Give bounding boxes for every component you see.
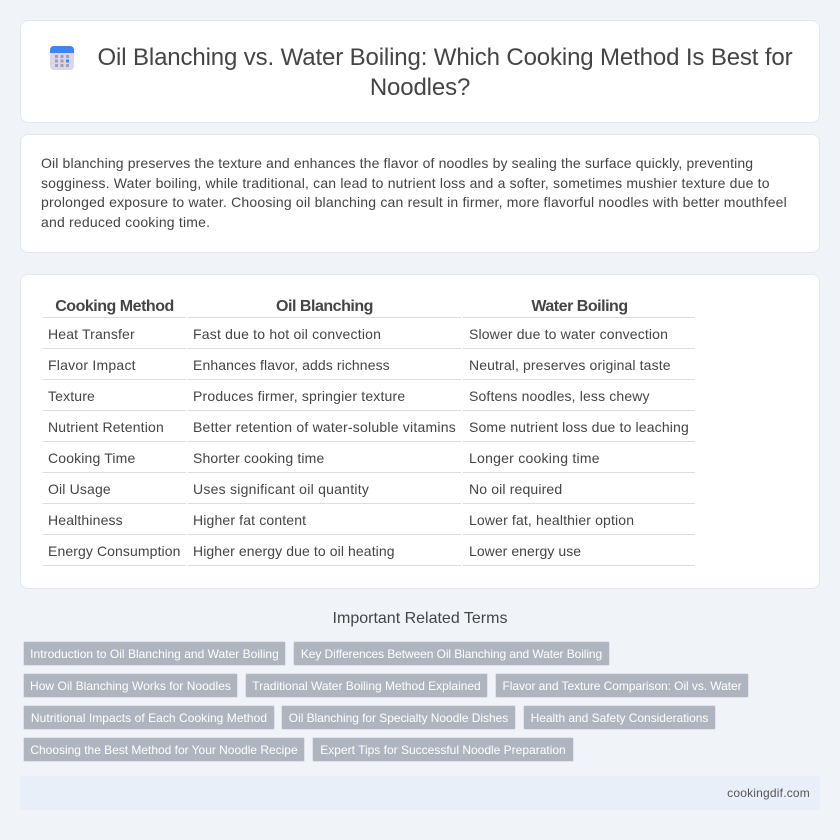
comparison table: Higher fat content bbox=[193, 512, 306, 528]
comparison table: Softens noodles, less chewy bbox=[469, 388, 650, 404]
header panel bbox=[20, 20, 820, 123]
related term tags: Flavor and Texture Comparison: Oil vs. Water bbox=[502, 679, 742, 693]
comparison table: Cooking Time bbox=[48, 450, 135, 466]
comparison table: Fast due to hot oil convection bbox=[193, 326, 381, 342]
comparison table: Produces firmer, springier texture bbox=[193, 388, 405, 404]
intro paragraph: Oil blanching preserves the texture and enhances the flavor of noodles by sealing the surface quickly, preventing bbox=[41, 155, 753, 171]
related term tags: How Oil Blanching Works for Noodles bbox=[30, 679, 231, 693]
comparison table: Cooking Method bbox=[55, 298, 174, 315]
comparison table: Water Boiling bbox=[531, 298, 628, 315]
comparison table: Energy Consumption bbox=[48, 543, 181, 559]
comparison table bbox=[43, 298, 695, 566]
related term tags: Traditional Water Boiling Method Explained bbox=[252, 679, 481, 693]
footer source text: cookingdif.com bbox=[727, 786, 810, 800]
comparison table: Slower due to water convection bbox=[469, 326, 668, 342]
comparison table: Oil Usage bbox=[48, 481, 111, 497]
related term tags: Oil Blanching for Specialty Noodle Dishes bbox=[289, 711, 508, 725]
comparison table: Flavor Impact bbox=[48, 357, 136, 373]
comparison table: Healthiness bbox=[48, 512, 123, 528]
comparison table panel bbox=[20, 274, 820, 589]
comparison table: Uses significant oil quantity bbox=[193, 481, 369, 497]
title: Oil Blanching vs. Water Boiling: Which Cooking Method Is Best for bbox=[98, 44, 792, 71]
comparison table: Shorter cooking time bbox=[193, 450, 324, 466]
comparison table: Higher energy due to oil heating bbox=[193, 543, 395, 559]
comparison table: Oil Blanching bbox=[276, 298, 373, 315]
comparison table: Lower energy use bbox=[469, 543, 581, 559]
comparison table: Texture bbox=[48, 388, 95, 404]
intro paragraph: prolonged exposure to water. Choosing oil blanching can result in firmer, more flavorful noodles with better mouthfeel bbox=[41, 194, 787, 210]
related term tags: Nutritional Impacts of Each Cooking Method bbox=[31, 711, 267, 725]
related terms heading: Important Related Terms bbox=[333, 610, 507, 627]
comparison table: Some nutrient loss due to leaching bbox=[469, 419, 689, 435]
comparison table: Heat Transfer bbox=[48, 326, 135, 342]
comparison table: Nutrient Retention bbox=[48, 419, 164, 435]
related term tags: Health and Safety Considerations bbox=[531, 711, 708, 725]
footer bar bbox=[20, 776, 820, 810]
comparison table: Longer cooking time bbox=[469, 450, 600, 466]
intro text panel bbox=[20, 134, 820, 253]
related term tags: Choosing the Best Method for Your Noodle Recipe bbox=[30, 743, 298, 757]
comparison table: Neutral, preserves original taste bbox=[469, 357, 671, 373]
comparison table: Lower fat, healthier option bbox=[469, 512, 634, 528]
intro paragraph: and reduced cooking time. bbox=[41, 214, 210, 230]
related term tags bbox=[23, 641, 749, 762]
intro paragraph bbox=[41, 155, 787, 230]
icon: calendar bbox=[50, 46, 74, 70]
intro paragraph: sogginess. Water boiling, while traditional, can lead to nutrient loss and a softer, sometimes mushier texture due to bbox=[41, 175, 770, 191]
title: Noodles? bbox=[370, 74, 470, 101]
comparison table: Better retention of water-soluble vitamins bbox=[193, 419, 456, 435]
related term tags: Key Differences Between Oil Blanching and Water Boiling bbox=[301, 647, 602, 661]
related term tags: Expert Tips for Successful Noodle Preparation bbox=[320, 743, 566, 757]
title bbox=[98, 44, 792, 101]
comparison table: No oil required bbox=[469, 481, 562, 497]
comparison table: Enhances flavor, adds richness bbox=[193, 357, 390, 373]
related term tags: Introduction to Oil Blanching and Water Boiling bbox=[30, 647, 279, 661]
